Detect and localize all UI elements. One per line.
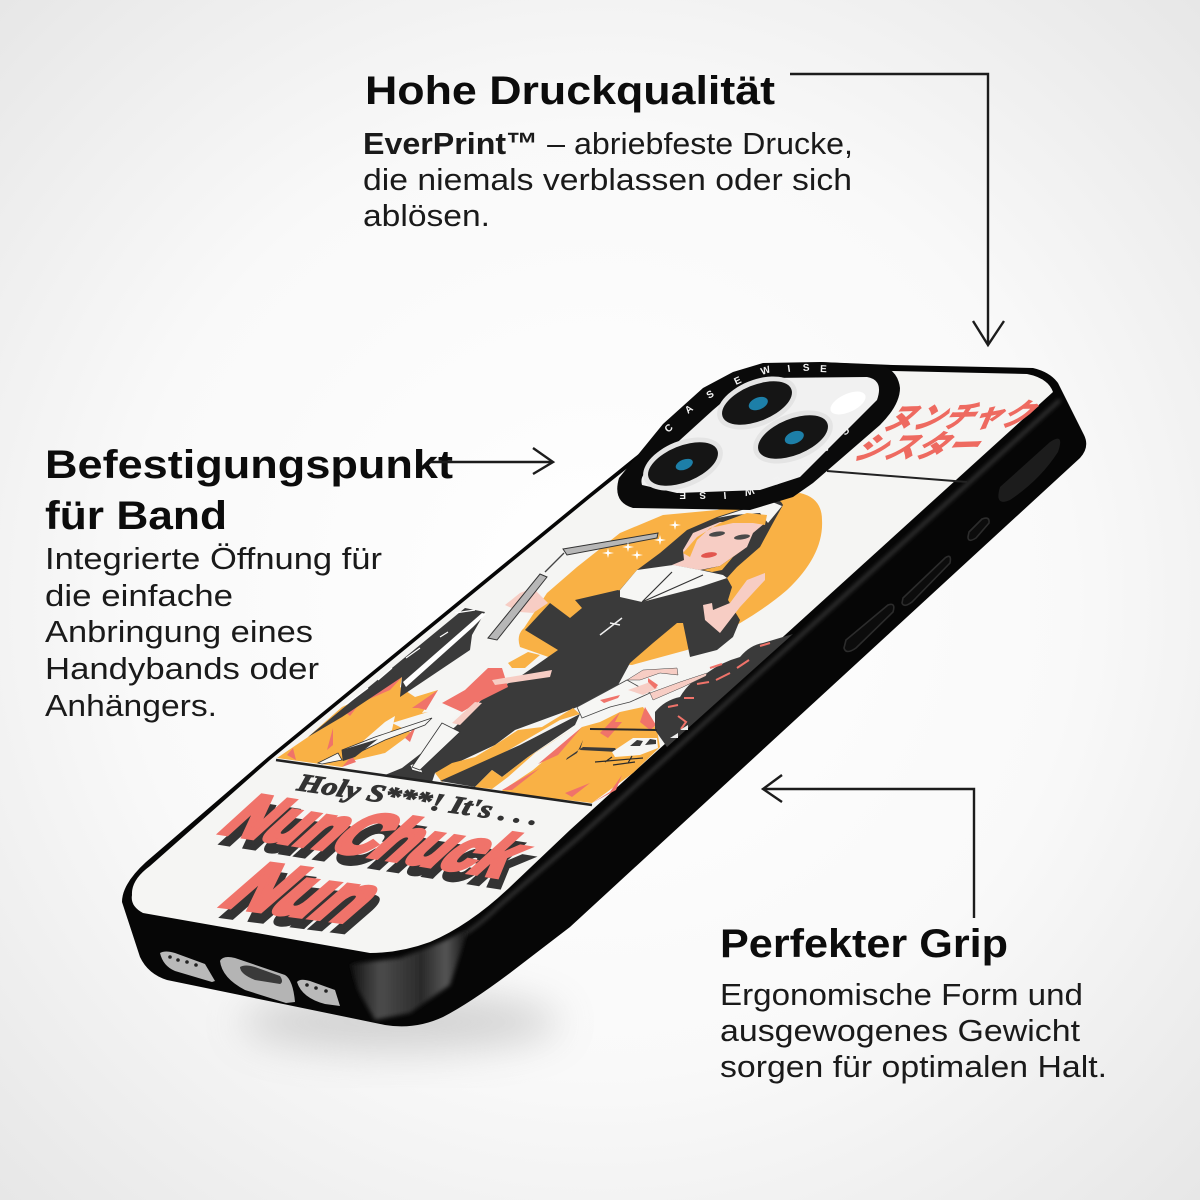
body text: die niemals verblassen oder sich bbox=[363, 162, 852, 197]
left speaker grill bbox=[160, 952, 215, 982]
tail bbox=[566, 740, 618, 760]
flame accents bbox=[287, 677, 656, 803]
nunchuck chain bbox=[545, 553, 564, 572]
printed back panel bbox=[132, 366, 1053, 953]
cross bbox=[600, 618, 622, 635]
nunchuck upper stick bbox=[563, 533, 658, 555]
nun figure bbox=[385, 500, 783, 789]
hair bbox=[648, 678, 658, 689]
arrow: lanyard point bbox=[430, 448, 553, 474]
lips bbox=[701, 551, 717, 559]
body text: die einfache bbox=[45, 578, 233, 613]
sparkles bbox=[602, 520, 681, 560]
body bbox=[577, 680, 650, 718]
orange fire right bbox=[500, 707, 660, 803]
shoe bbox=[318, 753, 342, 764]
body text: Handybands oder bbox=[45, 651, 319, 686]
ring lettering bottom: CASEWISE bbox=[679, 424, 851, 500]
left man bbox=[318, 652, 552, 770]
shorts bbox=[428, 705, 460, 723]
body text: Ergonomische Form und bbox=[720, 977, 1083, 1012]
flash bbox=[827, 387, 869, 419]
hand praying bbox=[703, 573, 765, 633]
callout: lanyard point bbox=[45, 443, 453, 723]
body text: ablösen. bbox=[363, 198, 490, 233]
rotor bbox=[590, 729, 657, 730]
lens opening bbox=[641, 377, 879, 493]
body text: Anbringung eines bbox=[45, 614, 313, 649]
smoke cloud bbox=[655, 634, 793, 747]
boot bbox=[342, 739, 378, 761]
body text bbox=[45, 541, 382, 723]
lower arm bbox=[650, 673, 707, 700]
bottom corner highlight bbox=[350, 930, 468, 1020]
white headpiece bbox=[717, 501, 782, 523]
bottom divider line bbox=[276, 760, 592, 805]
neck and face bbox=[672, 522, 765, 570]
skids bbox=[595, 756, 643, 765]
callout: print quality bbox=[363, 69, 853, 233]
side band inner edge bbox=[435, 400, 1060, 950]
standing leg bbox=[412, 723, 460, 770]
orange sun disc bbox=[519, 493, 822, 665]
callout: grip bbox=[720, 922, 1107, 1084]
hair bbox=[508, 652, 540, 668]
case body bbox=[122, 362, 1086, 1026]
lower hair bbox=[703, 547, 747, 572]
dress bbox=[385, 578, 740, 782]
white collar bbox=[620, 565, 727, 602]
nunchuck lower stick bbox=[488, 574, 547, 640]
body text: sorgen für optimalen Halt. bbox=[720, 1049, 1107, 1084]
head bbox=[628, 682, 658, 695]
heading: Perfekter Grip bbox=[720, 922, 1008, 966]
heading: Befestigungspunkt bbox=[45, 443, 453, 487]
white flames bbox=[362, 716, 395, 745]
phone shadow bbox=[240, 992, 560, 1052]
boot bbox=[410, 762, 423, 773]
top divider line bbox=[827, 471, 967, 482]
body text: Anhängers. bbox=[45, 688, 217, 723]
arrow: print quality bbox=[790, 74, 1004, 345]
cabin bbox=[612, 738, 658, 757]
collar line bbox=[642, 572, 703, 602]
orange trouser leg bbox=[435, 708, 580, 782]
collapsing building bbox=[308, 608, 486, 737]
orange fire left bbox=[277, 677, 438, 767]
right lens bbox=[745, 400, 841, 474]
left lens bbox=[635, 427, 731, 501]
upper arm bbox=[627, 668, 678, 680]
cream panel bbox=[132, 366, 1053, 953]
island frame bbox=[617, 362, 900, 510]
charging port bbox=[220, 957, 295, 1003]
veil bbox=[618, 500, 783, 592]
heading: Hohe Druckqualität bbox=[365, 69, 775, 113]
nunchuck headline: NunChuck bbox=[204, 784, 550, 888]
nun headline: Nun bbox=[203, 851, 409, 935]
ring lettering top: CASEWISE bbox=[663, 363, 827, 435]
tagline: Holy S***! It's . . . bbox=[293, 769, 543, 831]
camera island bbox=[617, 362, 900, 510]
right speaker grill bbox=[297, 980, 340, 1006]
helicopter bbox=[566, 729, 658, 765]
heading: für Band bbox=[45, 494, 227, 538]
japanese title line 1: ヌンチャク bbox=[877, 399, 1046, 436]
heading bbox=[45, 443, 453, 538]
side volume buttons bbox=[844, 518, 989, 652]
windows bbox=[630, 739, 656, 746]
leg shadow bbox=[440, 714, 580, 787]
extended leg bbox=[342, 718, 432, 760]
wound bbox=[600, 695, 620, 703]
body text: Integrierte Öffnung für bbox=[45, 541, 382, 576]
body text: ausgewogenes Gewicht bbox=[720, 1013, 1080, 1048]
hand holding stick bbox=[505, 588, 548, 613]
eyes bbox=[709, 531, 750, 540]
body text bbox=[720, 977, 1107, 1084]
arrow: grip bbox=[763, 775, 974, 918]
nun headline shadow: Nun bbox=[205, 861, 411, 945]
nunchuck headline shadow: NunChuck bbox=[206, 794, 552, 898]
hair bbox=[683, 513, 767, 557]
thin orange stripe bbox=[475, 728, 574, 789]
shirt bbox=[442, 668, 508, 712]
right man bbox=[577, 668, 707, 718]
japanese title line 2: シスター bbox=[847, 429, 992, 466]
arms bbox=[492, 670, 552, 685]
phone case bbox=[122, 362, 1086, 1026]
body text: EverPrint™ – abriebfeste Drucke, bbox=[363, 126, 853, 161]
side action button bbox=[998, 439, 1060, 502]
body text bbox=[363, 126, 853, 233]
upper lens bbox=[709, 366, 805, 440]
